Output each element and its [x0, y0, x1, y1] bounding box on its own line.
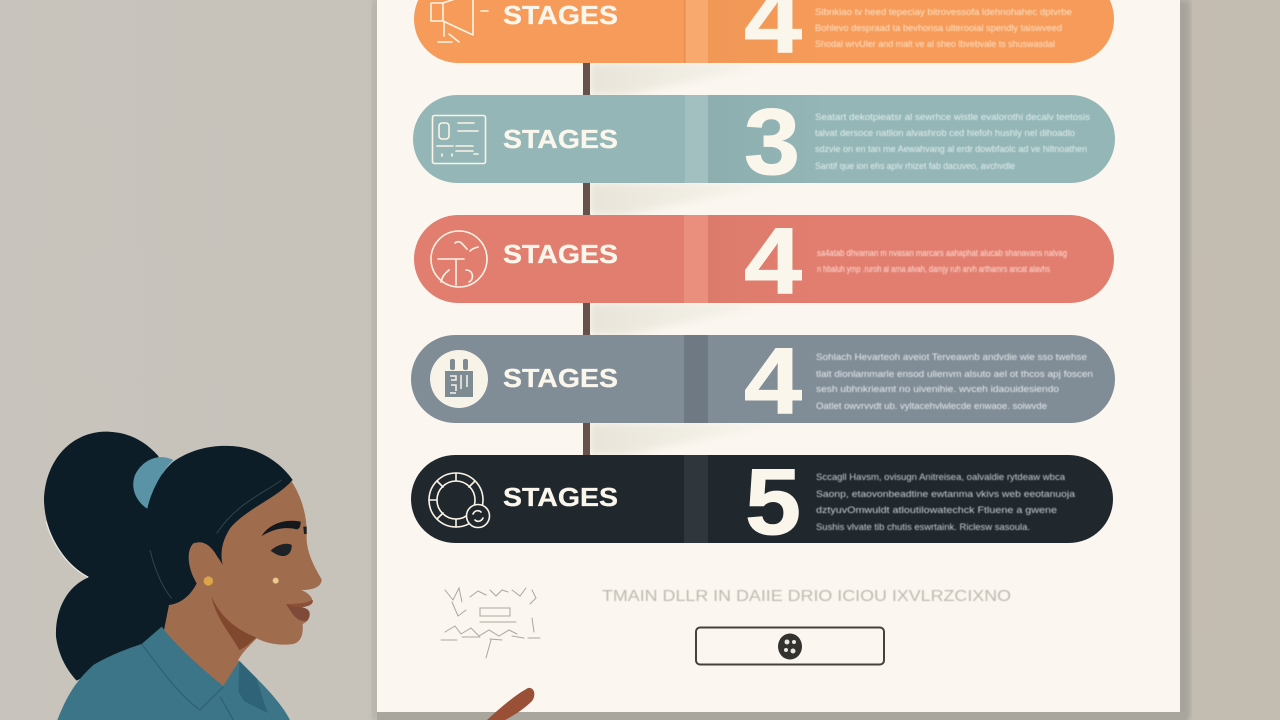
footer button [696, 628, 884, 664]
description text: Oatlet owvrvvdt ub. vyltacehvlwlecde enwaoe. soiwvde [816, 401, 1047, 412]
cast shadows under bars [590, 63, 780, 455]
number 4: 4 [744, 328, 802, 433]
collar lines [142, 644, 267, 720]
label: stages: STAGES [503, 124, 618, 154]
paper shadow right [1170, 0, 1190, 720]
label: stages: STAGES [503, 482, 618, 512]
panel: teal stage bar [413, 89, 1115, 194]
description text [815, 112, 1090, 172]
number 3: 3 [744, 89, 800, 194]
panel: dark stage bar [411, 449, 1113, 554]
description text [816, 352, 1093, 412]
icon: white circle with building [430, 350, 488, 408]
eye [271, 544, 292, 556]
bottom shadow strip [377, 712, 1187, 720]
panel: orange stage bar [414, 0, 1114, 72]
collar shade [238, 662, 267, 712]
label: stages: STAGES [503, 363, 618, 393]
hair strands [150, 480, 282, 598]
paper panel [377, 0, 1180, 712]
illustration: woman in profile [44, 432, 322, 720]
icon: circle emblem [431, 231, 487, 287]
connector stems [583, 62, 590, 456]
description text: sdzvie on en tan me Aewahvang al erdr dowbfaolc ad ve hiltnoathen [815, 144, 1087, 155]
description text: Saonp, etaovonbeadtine ewtanma vkivs web eeotanuoja [816, 489, 1076, 500]
icon: megaphone [431, 0, 488, 42]
number 5: 5 [745, 449, 801, 554]
icon: id card [432, 116, 486, 164]
description text: sesh ubhnkrieamt no uivenihie. wvceh idaouidesiendo [816, 384, 1059, 395]
description text: Sushis vlvate tib chutis eswrtaink. Riclesw sasoula. [816, 522, 1030, 533]
description text: sa4atab dhvaman m nvasan marcars aahaphat alucab shanavans nalvag [817, 248, 1067, 259]
earring [204, 576, 213, 586]
ear [190, 542, 221, 580]
ponytail hair [44, 432, 173, 681]
number 4: 4 [744, 208, 802, 313]
icon: button badge [778, 634, 802, 660]
paper shadow left [372, 0, 380, 720]
description text: dztyuvOmwuldt atloutilowatechck Ftluene a gwene [816, 505, 1057, 516]
hair tie [133, 457, 173, 509]
icon: ring with refresh badge [429, 473, 490, 528]
description text: Seatart dekotpieatsr al sewrhce wistle evalorothi decalv teetosis [815, 112, 1090, 123]
label: stages: STAGES [503, 239, 618, 269]
description text [816, 472, 1076, 533]
description text: Sibnkiao tv heed tepeciay bitrovessofa ldehnohahec dptvrbe [815, 7, 1072, 18]
panel: slate stage bar [411, 328, 1115, 433]
description text: Bohlevo despraad ta bevhonsa ulterooial spendly taiswveed [815, 23, 1062, 34]
description text [817, 248, 1067, 275]
description text [815, 7, 1072, 50]
pointing hand [487, 688, 534, 720]
shirt [57, 627, 290, 720]
description text: Shodal wrvUler and malt ve al sheo lbvebvale ts shuswasdal [815, 39, 1055, 50]
eyebrow [262, 521, 301, 536]
label: stages: STAGES [503, 0, 618, 30]
front hair [150, 446, 293, 605]
description text: Sccagll Havsm, ovisugn Anitreisea, oalvaldie rytdeaw wbca [816, 472, 1066, 483]
hair highlight [46, 522, 88, 577]
neck and face [163, 482, 322, 697]
footer caption: TMAIN DLLR IN DAIIE DRIO ICIOU IXVLRZCIXNO [602, 588, 1011, 605]
description text: Sohlach Hevarteoh aveiot Terveawnb andvdie wie sso twehse [816, 352, 1087, 363]
icon: faint sketch logo [441, 588, 540, 658]
cheek dot [273, 578, 279, 584]
neck shadow [212, 597, 256, 650]
panel: red stage bar [414, 208, 1114, 313]
description text: tlait dionlammarle ensod ulienvm alsuto ael ot thcos apj foscen [816, 369, 1093, 380]
description text: n hbaluh ymp .ruroh al arna alvah, damjy ruh arvh arthamrs ancat alavhs [817, 264, 1050, 275]
description text: talvat dersoce natlion alvashrob ced hiefoh hushly nel dihoadlo [815, 128, 1075, 139]
lips [286, 600, 313, 621]
description text: Santif que ion ehs apiv rhizet fab dacuveo, avchvdle [815, 161, 1015, 172]
